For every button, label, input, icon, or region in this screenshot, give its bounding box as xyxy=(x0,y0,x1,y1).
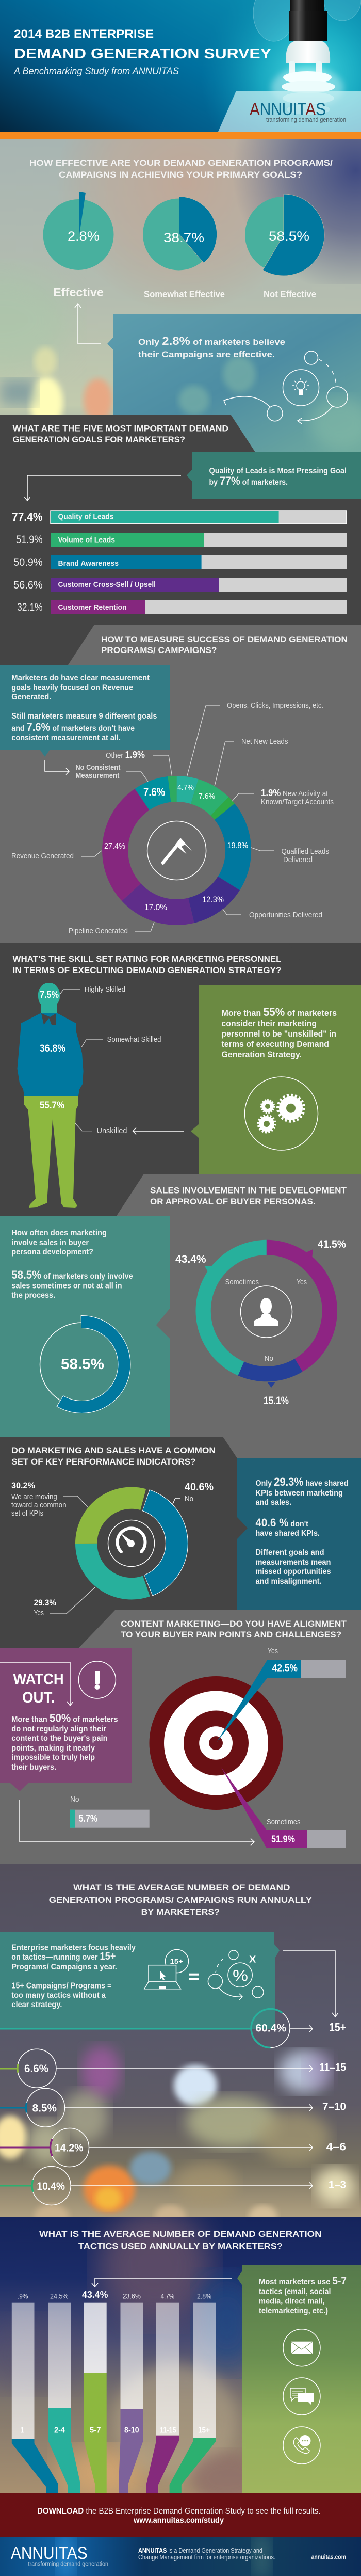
bar: quality of leads: 77.4% xyxy=(12,510,43,523)
bar: customer cross-sell xyxy=(13,578,347,592)
callout: unskilled panel: More than 55% of marketers xyxy=(222,1006,337,1019)
bar: yes 42.5%: 42.5% xyxy=(272,1663,298,1674)
heading: skill set: IN TERMS OF EXECUTING DEMAND GENERATION STRATEGY? xyxy=(12,965,282,975)
donut labels: Net New Leads xyxy=(241,738,288,746)
row: 7-10 8.5% xyxy=(0,2088,346,2127)
arrow: to 43.4% xyxy=(92,2278,232,2287)
donut labels: No Consistent xyxy=(75,764,121,772)
logo: ANNUITAS: ANNUITAS xyxy=(250,100,326,119)
heading: average tactics: WHAT IS THE AVERAGE NUMBER OF DEMAND GENERATION xyxy=(39,2229,322,2239)
donut labels: 1.9% New Activity at xyxy=(261,788,328,798)
column: 8-10 tactics: 8-10 xyxy=(124,2426,139,2435)
bar: quality of leads xyxy=(12,510,347,524)
bar: yes 42.5% xyxy=(217,1647,346,1742)
row: 11-15 6.6%: 11–15 xyxy=(319,2062,346,2074)
logo: ANNUITAS: transforming demand generation xyxy=(266,116,346,123)
website: annuitas.com xyxy=(311,2553,346,2561)
column: 11-15 tactics xyxy=(146,2292,179,2493)
pie chart: somewhat effective xyxy=(143,197,217,271)
row: 15+ 60.4%: 60.4% xyxy=(256,2023,286,2034)
panel: content marketing section background xyxy=(0,1610,361,1864)
bar: sometimes 51.9%: 51.9% xyxy=(271,1834,295,1845)
bar: customer retention: 32.1% xyxy=(17,601,43,613)
callout: watch out: OUT. xyxy=(22,1689,55,1706)
figure: person split into skill levels: Somewhat Skilled xyxy=(107,1036,161,1044)
footer logo: transforming demand generation xyxy=(28,2560,108,2568)
donut labels: 19.8% xyxy=(227,841,248,850)
callout: watch out: WATCH xyxy=(13,1671,64,1688)
heading: average campaigns: WHAT IS THE AVERAGE NUMBER OF DEMAND xyxy=(73,1883,290,1893)
bar: brand awareness: 50.9% xyxy=(13,556,43,568)
callout: 5-7 tactics: Most marketers use 5-7 xyxy=(259,2276,347,2287)
bar: sometimes 51.9% xyxy=(221,1767,346,1848)
callout: persona development: 58.5% of marketers only involve xyxy=(11,1268,133,1281)
heading: sales involvement: SALES INVOLVEMENT IN THE DEVELOPMENT xyxy=(150,1186,347,1196)
icon: laptop equals percent formula: 15+ xyxy=(170,1957,183,1965)
bar: customer retention: Customer Retention xyxy=(58,603,127,612)
callout: only 2.8%: their Campaigns are effective. xyxy=(138,349,275,359)
bar: brand awareness xyxy=(13,555,347,569)
callout: quality of leads: by 77% of marketers. xyxy=(209,474,288,487)
callout: persona development: involve sales in buyer xyxy=(11,1238,89,1247)
icon: email xyxy=(283,2329,320,2366)
callout: quality of leads: Quality of Leads is Most Pressing Goal xyxy=(209,467,347,475)
pie labels: Effective xyxy=(53,285,104,299)
company description: Change Management firm for enterprise organizations. xyxy=(138,2553,275,2561)
KPI labels: 29.3% xyxy=(34,1598,56,1608)
donut chart: KPIs xyxy=(86,1498,177,1588)
column: 5-7 tactics xyxy=(82,2289,108,2493)
figure: person split into skill levels: 55.7% xyxy=(40,1100,64,1111)
column: 8-10 tactics xyxy=(119,2292,143,2493)
donut chart: buyer personas: 15.1% xyxy=(264,1395,289,1407)
icon: telemarketing phone xyxy=(283,2427,320,2464)
row: 1-3 10.4%: 1–3 xyxy=(329,2179,346,2191)
logo: ANNUITAS xyxy=(250,100,346,123)
pie labels: Not Effective xyxy=(264,289,316,299)
callout: shared KPIs: KPIs between marketing xyxy=(256,1489,343,1498)
icon: caliper xyxy=(147,821,206,880)
bar: volume of leads xyxy=(16,533,347,547)
donut labels: 17.0% xyxy=(144,902,167,912)
callout: watch out: content to the buyer's pain xyxy=(11,1734,107,1743)
heading: sales involvement: OR APPROVAL OF BUYER PERSONAS. xyxy=(150,1197,316,1206)
row: 15+ 60.4% xyxy=(0,2009,346,2047)
callout: shared KPIs: Only 29.3% have shared xyxy=(256,1475,348,1488)
arrow: to 15+ xyxy=(283,1951,338,2017)
donut labels: Revenue Generated xyxy=(11,852,74,861)
callout: shared KPIs: Different goals and xyxy=(256,1548,324,1557)
callout: persona development: sales sometimes or not at all in xyxy=(11,1282,122,1291)
icon: gauge xyxy=(108,1520,155,1566)
donut labels: Opens, Clicks, Impressions, etc. xyxy=(227,702,323,710)
callout: watch out xyxy=(0,1648,132,1791)
title xyxy=(13,27,271,77)
KPI labels: 30.2% xyxy=(11,1481,35,1490)
column: 1 tactic: 1 xyxy=(21,2426,24,2435)
callout: shared KPIs: and sales. xyxy=(256,1498,291,1507)
column: 2-4 tactics: 2-4 xyxy=(54,2426,65,2435)
KPI labels: 40.6% xyxy=(185,1481,214,1493)
panel: KPI section background xyxy=(0,1437,361,1648)
donut labels: Pipeline Generated xyxy=(69,927,128,935)
donut chart: buyer personas: Sometimes xyxy=(225,1278,259,1286)
callout: measurement goals: Generated. xyxy=(11,693,51,702)
bar: brand awareness: Brand Awareness xyxy=(58,559,119,568)
callout: measurement goals: and 7.6% of marketers don't have xyxy=(11,721,135,734)
column: 11-15 tactics: 11-15 xyxy=(160,2426,176,2435)
callout: quality of leads xyxy=(187,452,361,499)
heading: average campaigns xyxy=(49,1883,313,1917)
donut labels: Measurement xyxy=(75,772,120,780)
row: 4-6 14.2%: 4–6 xyxy=(326,2141,346,2153)
bar: customer retention xyxy=(17,600,347,614)
arrow: to no consistent measurement xyxy=(45,760,69,774)
heading: common KPIs: SET OF KEY PERFORMANCE INDICATORS? xyxy=(11,1457,196,1467)
ring chart: 58.5%: 58.5% xyxy=(61,1356,104,1373)
bar: volume of leads: 51.9% xyxy=(16,534,43,546)
donut labels: Delivered xyxy=(283,856,313,864)
heading: how effective: CAMPAIGNS IN ACHIEVING YOUR PRIMARY GOALS? xyxy=(59,170,302,180)
column: 1 tactic: .9% xyxy=(18,2292,28,2300)
heading: five goals xyxy=(12,424,228,444)
bar chart: tactics xyxy=(12,2289,216,2493)
donut labels xyxy=(11,702,334,935)
panel: skill set section background xyxy=(0,943,361,1216)
donut labels: 12.3% xyxy=(202,895,224,904)
panel: goals section background xyxy=(0,415,361,665)
heading: average tactics: TACTICS USED ANNUALLY BY MARKETERS? xyxy=(78,2241,283,2251)
callout: too many tactics: clear strategy. xyxy=(11,2000,62,2009)
callout: 5-7 tactics xyxy=(237,2265,361,2493)
callout: unskilled panel: personnel to be "unskilled" in xyxy=(222,1029,336,1039)
icon: gears xyxy=(244,1077,318,1150)
heading: five goals: WHAT ARE THE FIVE MOST IMPORTANT DEMAND xyxy=(12,424,228,434)
pie chart: effective: 2.8% xyxy=(68,229,100,244)
light bulb xyxy=(253,0,361,115)
panel: campaigns section background xyxy=(0,1864,361,2229)
callout: too many tactics: Programs/ Campaigns a year. xyxy=(11,1963,117,1971)
callout: 5-7 tactics: tactics (email, social xyxy=(259,2287,331,2296)
callout: unskilled panel: terms of executing Demand xyxy=(222,1039,329,1049)
callout: only 2.8%: Only 2.8% of marketers believe xyxy=(138,335,285,347)
donut chart: buyer personas: No xyxy=(264,1355,273,1363)
KPI labels: We are moving xyxy=(11,1493,57,1501)
heading: content marketing: CONTENT MARKETING—DO YOU HAVE ALIGNMENT xyxy=(121,1619,347,1629)
title: DEMAND GENERATION SURVEY xyxy=(14,45,271,61)
donut labels: Other 1.9% xyxy=(106,750,145,760)
callout: shared KPIs: and misalignment. xyxy=(256,1577,322,1586)
company description: ANNUITAS is a Demand Generation Strategy and xyxy=(138,2547,262,2554)
arrow: watch out to sometimes xyxy=(20,1800,254,1845)
callout: too many tactics xyxy=(0,1932,280,2029)
pie chart: not effective xyxy=(245,194,324,276)
heading: common KPIs xyxy=(11,1445,216,1467)
column: 15+ tactics: 15+ xyxy=(198,2426,210,2435)
pie chart: somewhat effective: 38.7% xyxy=(163,231,204,245)
KPI labels: Yes xyxy=(34,1609,44,1617)
bar: no 5.7%: No xyxy=(70,1795,79,1804)
bar: sometimes 51.9%: Sometimes xyxy=(267,1818,301,1826)
arrow: callout to effective xyxy=(75,304,101,344)
heading: five goals: GENERATION GOALS FOR MARKETERS? xyxy=(12,435,185,444)
heading: how effective: HOW EFFECTIVE ARE YOUR DEMAND GENERATION PROGRAMS/ xyxy=(29,158,333,168)
KPI labels: toward a common xyxy=(11,1501,67,1509)
donut labels: 7.6% xyxy=(143,785,165,799)
row: 11-15 6.6% xyxy=(0,2049,346,2088)
donut chart: measurement xyxy=(115,789,238,912)
KPI labels xyxy=(11,1481,214,1617)
row: 4-6 14.2%: 14.2% xyxy=(55,2142,84,2154)
row: 4-6 14.2% xyxy=(0,2128,346,2167)
row: 1-3 10.4% xyxy=(0,2166,346,2205)
callout: watch out: More than 50% of marketers xyxy=(11,1712,118,1725)
panel: download banner: DOWNLOAD the B2B Enterprise Demand Generation Study to see the full results. xyxy=(37,2507,320,2516)
KPI labels: No xyxy=(185,1495,193,1503)
footer logo xyxy=(11,2547,108,2567)
pie labels xyxy=(53,285,316,299)
callout: unskilled panel xyxy=(191,985,361,1174)
figure: person split into skill levels: 7.5% xyxy=(40,990,59,1000)
bar chart: goals xyxy=(12,510,347,614)
row: 1-3 10.4%: 10.4% xyxy=(37,2181,65,2192)
panel: download banner: www.annuitas.com/study xyxy=(133,2516,224,2525)
chart: target xyxy=(150,1647,346,1848)
title: 2014 B2B ENTERPRISE xyxy=(14,27,154,40)
icon: ideas cycle xyxy=(224,351,348,424)
column: 1 tactic xyxy=(12,2292,58,2493)
donut labels: Opportunities Delivered xyxy=(249,911,322,919)
row: 11-15 6.6%: 6.6% xyxy=(24,2063,48,2075)
callout: 5-7 tactics: telemarketing, etc.) xyxy=(259,2307,328,2315)
panel: footer xyxy=(0,2535,361,2576)
callout: measurement goals xyxy=(0,665,170,757)
bar: no 5.7%: 5.7% xyxy=(79,1814,97,1824)
icon: laptop equals percent formula xyxy=(144,1949,264,2000)
heading: measure success xyxy=(101,634,348,655)
callout: measurement goals: consistent measurement at all. xyxy=(11,734,121,742)
callout: watch out: their buyers. xyxy=(11,1763,56,1772)
figure: person split into skill levels: Unskilled xyxy=(97,1127,127,1135)
callout: shared KPIs: missed opportunities xyxy=(256,1567,331,1576)
callout: persona development: the process. xyxy=(11,1291,55,1300)
callout: 5-7 tactics: media, direct mail, xyxy=(259,2297,325,2306)
callout: unskilled panel: Generation Strategy. xyxy=(222,1050,302,1059)
panel: measure section background xyxy=(0,625,361,943)
callout: measurement goals: goals heavily focused on Revenue xyxy=(11,683,133,692)
figure: person split into skill levels xyxy=(18,983,161,1208)
donut labels: Qualified Leads xyxy=(282,848,329,856)
callout: shared KPIs: have shared KPIs. xyxy=(256,1529,320,1538)
callout: persona development: How often does marketing xyxy=(11,1229,107,1237)
pie chart: not effective: 58.5% xyxy=(269,229,309,244)
row: 7-10 8.5%: 7–10 xyxy=(322,2101,346,2113)
callout: shared KPIs: 40.6 % don't xyxy=(256,1516,308,1529)
heading: skill set: WHAT'S THE SKILL SET RATING FOR MARKETING PERSONNEL xyxy=(12,954,282,964)
callout: measurement goals: Marketers do have clear measurement xyxy=(11,674,150,682)
callout: too many tactics: 15+ Campaigns/ Programs = xyxy=(11,1982,111,1991)
panel: sales involvement section background xyxy=(0,1174,361,1458)
heading: how effective xyxy=(29,158,333,180)
KPI labels: set of KPIs xyxy=(11,1509,43,1518)
heading: common KPIs: DO MARKETING AND SALES HAVE A COMMON xyxy=(11,1445,216,1455)
column: 2-4 tactics xyxy=(48,2292,80,2493)
donut labels: 4.7% xyxy=(177,783,194,792)
bar: quality of leads: Quality of Leads xyxy=(58,513,113,521)
panel: download banner xyxy=(0,2493,361,2537)
footer logo: ANNUITAS xyxy=(11,2543,88,2563)
icon: laptop equals percent formula: X xyxy=(249,1954,256,1965)
donut labels: Known/Target Accounts xyxy=(261,798,334,806)
row: 7-10 8.5%: 8.5% xyxy=(32,2103,57,2114)
heading: sales involvement xyxy=(150,1186,347,1206)
panel: header banner xyxy=(0,0,361,132)
callout: too many tactics: Enterprise marketers focus heavily xyxy=(11,1944,136,1952)
heading: average campaigns: BY MARKETERS? xyxy=(141,1907,220,1917)
ring chart: 58.5% xyxy=(39,1322,124,1407)
orange divider band xyxy=(0,132,361,139)
bar: volume of leads: Volume of Leads xyxy=(58,536,115,545)
column: 5-7 tactics: 5-7 xyxy=(90,2426,101,2435)
heading: skill set xyxy=(12,954,282,975)
logo plate xyxy=(218,91,361,132)
callout: too many tactics: on tactics—running over 15+ xyxy=(11,1951,116,1962)
column: 8-10 tactics: 23.6% xyxy=(123,2292,141,2300)
heading: measure success: HOW TO MEASURE SUCCESS OF DEMAND GENERATION xyxy=(101,634,348,644)
column: 2-4 tactics: 24.5% xyxy=(50,2292,69,2300)
callout: measurement goals: Still marketers measure 9 different goals xyxy=(11,712,157,721)
bar: yes 42.5%: Yes xyxy=(268,1647,278,1656)
panel: effectiveness section background xyxy=(0,139,361,452)
donut chart: buyer personas: Yes xyxy=(297,1278,307,1286)
donut chart: buyer personas: 41.5% xyxy=(318,1238,346,1250)
callout: persona development xyxy=(0,1216,170,1437)
column: 15+ tactics xyxy=(170,2292,216,2493)
callout: only 2.8% xyxy=(107,314,361,452)
heading: content marketing: TO YOUR BUYER PAIN POINTS AND CHALLENGES? xyxy=(121,1630,341,1640)
icon: buyer persona xyxy=(240,1286,292,1338)
title: A Benchmarking Study from ANNUITAS xyxy=(13,66,179,77)
donut labels: 27.4% xyxy=(104,842,125,851)
figure: person split into skill levels: Highly Skilled xyxy=(85,985,125,994)
pie labels: Somewhat Effective xyxy=(144,289,225,299)
donut chart: buyer personas: 43.4% xyxy=(175,1253,206,1265)
column: 15+ tactics: 2.8% xyxy=(197,2292,211,2300)
callout: too many tactics: too many tactics without a xyxy=(11,1991,106,2000)
bar: no 5.7% xyxy=(70,1795,150,1828)
donut labels: 7.6% xyxy=(199,792,215,801)
company description xyxy=(138,2548,275,2561)
callout: shared KPIs xyxy=(237,1458,361,1610)
arrow: callout to bar chart xyxy=(25,475,181,501)
callout: watch out: points, making it nearly xyxy=(11,1744,95,1753)
callout: watch out: impossible to truly help xyxy=(11,1753,95,1762)
heading: content marketing xyxy=(121,1619,347,1640)
arrow: to unskilled xyxy=(133,1127,184,1135)
callout: unskilled panel: consider their marketing xyxy=(222,1019,317,1028)
bar: customer cross-sell: 56.6% xyxy=(13,579,43,591)
figure: person split into skill levels: 36.8% xyxy=(40,1043,65,1054)
heading: average campaigns: GENERATION PROGRAMS/ CAMPAIGNS RUN ANNUALLY xyxy=(49,1895,313,1905)
donut chart: buyer personas xyxy=(175,1238,346,1407)
callout: watch out: do not regularly align their xyxy=(11,1725,106,1734)
callout: persona development: persona development? xyxy=(11,1248,93,1257)
column: 11-15 tactics: 4.7% xyxy=(161,2292,174,2300)
icon: laptop equals percent formula: % xyxy=(233,1967,248,1984)
heading: measure success: PROGRAMS/ CAMPAIGNS? xyxy=(101,645,217,655)
icon: social chat xyxy=(283,2378,320,2415)
row: 15+ 60.4%: 15+ xyxy=(329,2021,346,2034)
column: 5-7 tactics: 43.4% xyxy=(82,2289,108,2300)
heading: average tactics xyxy=(39,2229,322,2251)
panel: tactics section background xyxy=(0,2209,361,2504)
bar: customer cross-sell: Customer Cross-Sell / Upsell xyxy=(58,580,156,589)
callout: shared KPIs: measurements mean xyxy=(256,1558,331,1567)
pie chart: effective xyxy=(43,192,113,270)
